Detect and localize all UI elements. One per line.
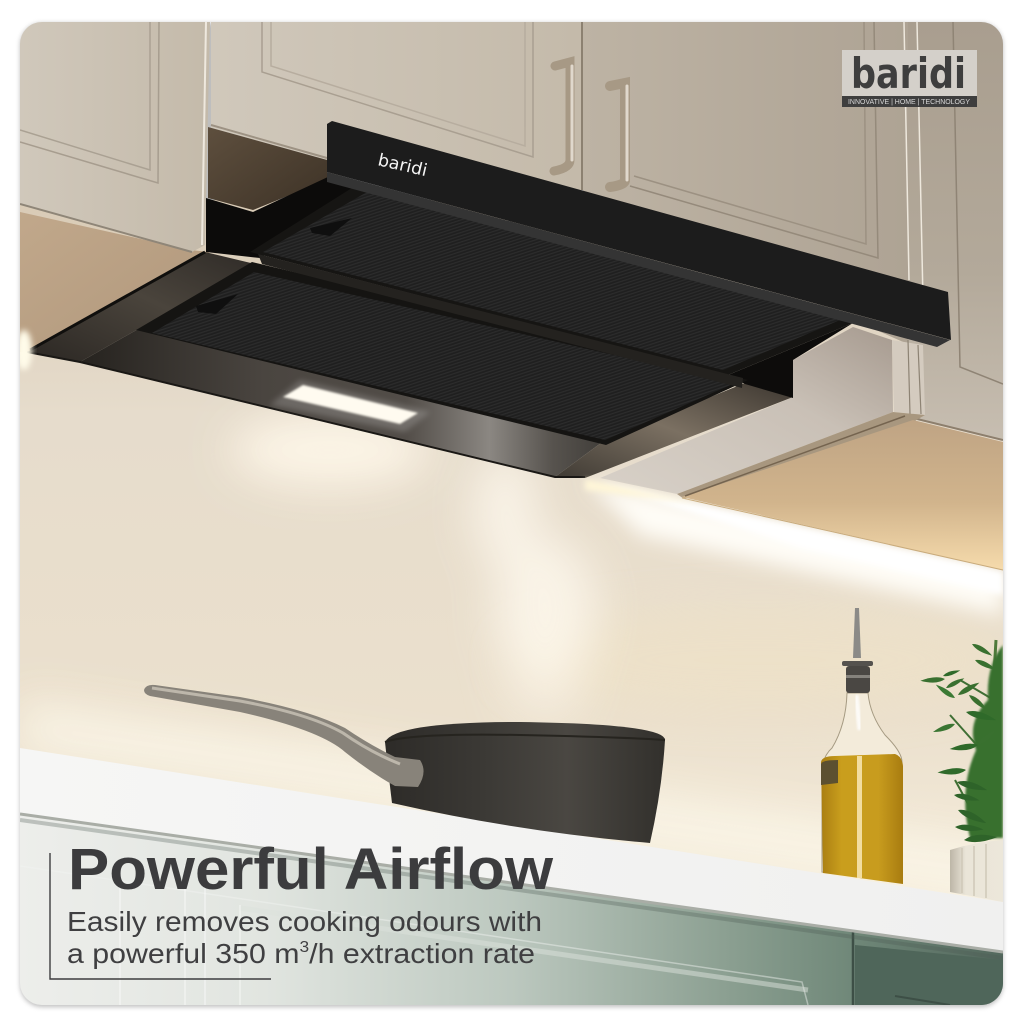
dark hood chassis [206,178,351,258]
middle cabinet door [211,22,581,190]
steam plume [473,450,597,728]
tray front panel [80,328,605,477]
plant stems and leaves [920,640,1003,843]
hood tray [27,186,853,478]
description text: a powerful 350 m [67,938,282,969]
recess behind hood [208,127,327,210]
glass reflection [857,756,862,878]
pan body [385,722,665,843]
left edge light spill [16,330,32,370]
lower cabinets [20,810,1003,1005]
white pull-out cover panel [600,327,925,499]
description text: Easily removes cooking odours with [67,906,542,937]
description text [67,906,542,969]
hood logo: baridi [376,150,429,181]
right cabinet underside [682,416,1003,570]
rear filter latch [310,218,352,236]
front grease filter [152,272,735,440]
glass body [822,693,902,882]
tray left side panel [27,252,255,362]
cooking pan [144,685,665,843]
far right cabinet door [904,22,1003,440]
bar lower lip [327,172,950,347]
description text: /h extraction rate [309,938,535,969]
right cabinet door [582,22,910,345]
left upper cabinet [20,22,210,252]
left upper cabinet underside [20,212,210,352]
rear filter frame [250,186,853,375]
wall backsplash [20,200,1010,920]
ribbed pot [950,840,1003,902]
oil [821,754,903,884]
brand logo: baridi [851,49,966,98]
pan rim [385,735,665,742]
pan handle [144,685,424,787]
steel spout [853,608,861,658]
pourer cap [842,661,873,693]
description text: 3 [300,939,309,956]
heading: Powerful Airflow [68,837,554,902]
potted plant [920,640,1003,902]
brand logo: INNOVATIVE | HOME | TECHNOLOGY [848,97,970,106]
front filter frame [136,262,748,445]
tray upper edge [30,252,205,350]
rear grease filter [263,192,840,370]
right black bracket [728,323,853,398]
label shadow [821,760,838,785]
front filter latch [196,294,238,314]
tray right panel [555,383,793,478]
hood front bar [327,121,951,347]
tray front edge [27,352,585,477]
neck highlight [856,695,860,730]
led lamp [270,380,430,432]
countertop [20,748,1003,958]
divider bar [258,254,743,388]
cabinet handle right [610,83,627,187]
oil bottle [821,608,903,884]
callout frame line [50,853,271,979]
bar face [327,121,951,340]
lit strip under hood [585,479,700,504]
cabinet handle left [554,62,572,171]
light strip glow [585,480,1003,615]
